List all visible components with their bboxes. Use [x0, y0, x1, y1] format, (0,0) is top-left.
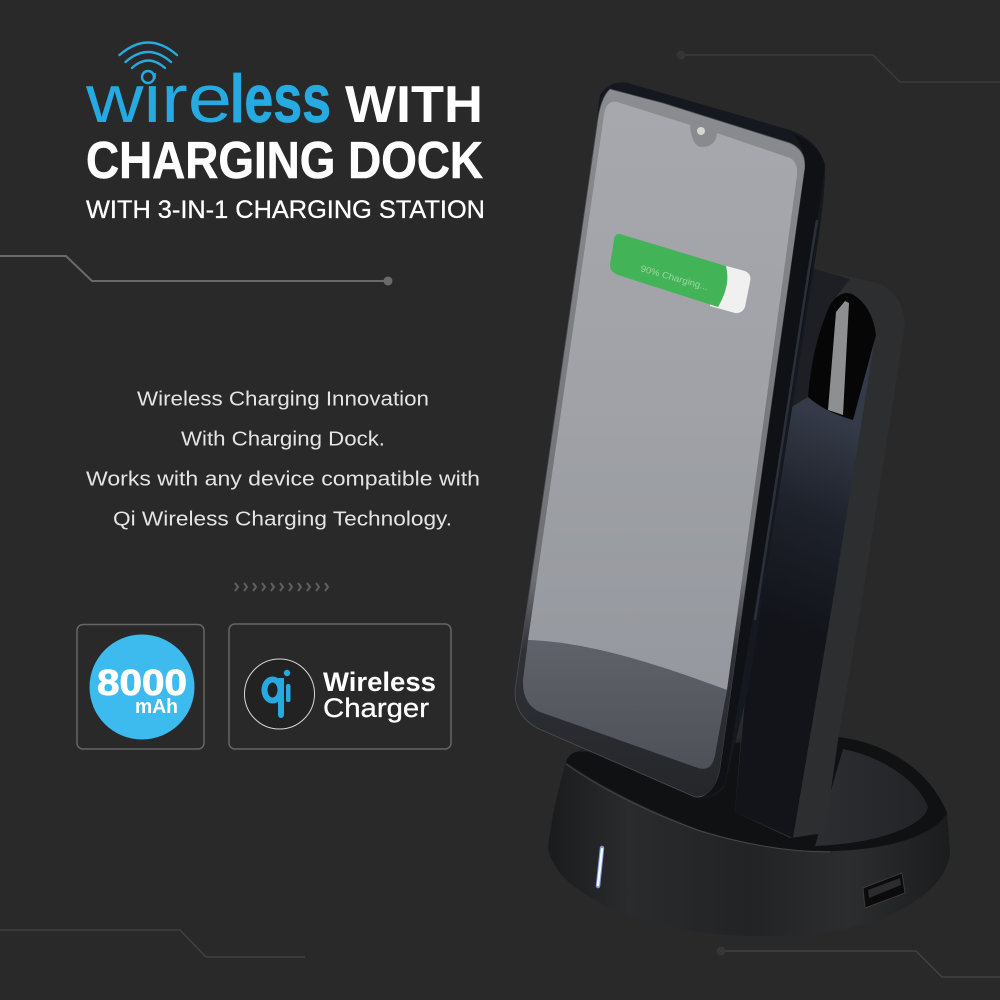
capacity number: 8000 — [97, 662, 187, 703]
status LED — [598, 848, 602, 886]
power bank body — [735, 268, 905, 838]
power bank top shade — [780, 268, 850, 420]
phone glass bezel — [515, 89, 805, 797]
USB port — [863, 873, 905, 908]
icon: wifi signal — [120, 42, 177, 83]
screen reflection — [523, 640, 727, 769]
dock body — [548, 737, 950, 936]
panel: Qi wireless charger — [229, 624, 451, 749]
description text: Qi Wireless Charging Technology. — [113, 508, 452, 530]
label: Wireless: Wireless — [323, 667, 436, 697]
connector line: bottom right — [716, 946, 1000, 977]
phone side sheen — [755, 220, 817, 620]
subtitle: WITH 3-IN-1 CHARGING STATION — [86, 196, 485, 224]
title line: CHARGING DOCK: CHARGING DOCK — [86, 132, 483, 190]
description text: With Charging Dock. — [181, 428, 385, 450]
title word: WITH: WITH — [345, 76, 483, 134]
title word: less: less — [230, 61, 331, 137]
connector line: top left — [0, 256, 392, 286]
charging indicator — [610, 234, 750, 313]
charging text: 90% Charging... — [639, 263, 709, 292]
title word: wire: wire — [85, 61, 232, 137]
glossy display cap — [808, 293, 876, 420]
description text: Wireless Charging Innovation — [137, 388, 429, 410]
blue circle — [90, 634, 194, 740]
camera dot — [697, 127, 705, 135]
product photo: phone on dock — [515, 82, 950, 936]
dock rim highlight — [566, 764, 830, 852]
dock top rim — [566, 737, 947, 851]
label: Charger: Charger — [323, 693, 429, 723]
icon: Qi logo — [244, 659, 314, 729]
phone body — [515, 82, 825, 798]
power bank navy front — [735, 337, 875, 838]
description text: Works with any device compatible with — [86, 468, 480, 490]
gloss highlight — [828, 301, 849, 415]
dock tray — [815, 749, 928, 846]
description text — [86, 388, 480, 530]
chevron row — [235, 583, 328, 591]
capacity unit: mAh — [135, 696, 178, 718]
connector line: top right — [676, 50, 1000, 82]
title — [85, 61, 485, 224]
connector line: bottom left — [0, 930, 305, 957]
panel: 8000 mAh badge — [77, 624, 204, 749]
phone frame edge — [702, 133, 825, 797]
screen — [528, 102, 797, 690]
